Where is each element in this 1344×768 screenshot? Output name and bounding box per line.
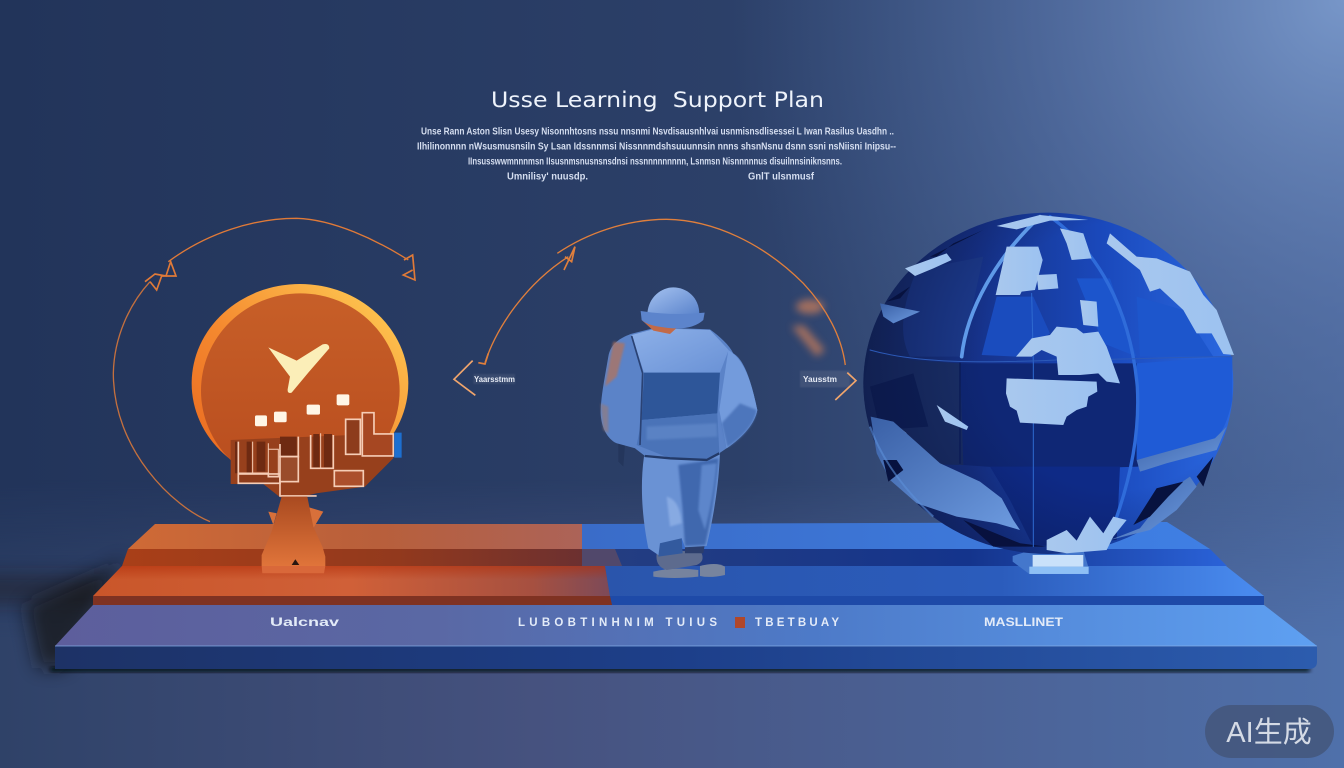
land masses	[893, 215, 1234, 553]
rim light	[870, 427, 933, 517]
side shading	[605, 342, 625, 387]
right sleeve	[719, 350, 757, 448]
platform shadow	[50, 667, 1310, 672]
left arc arrow	[113, 218, 415, 522]
city blocks	[231, 413, 402, 497]
legend swatch	[735, 617, 745, 628]
body silhouette with arms	[601, 327, 757, 461]
description text block: Ilhilinonnnn nWsusmusnsiln Sy Lsan Idssnnmsi Nissnnmdshsuuunnsin nnns shsnNsnu dsnn ssni nsNiisni Inipsu--	[417, 142, 896, 152]
label: left: Ualcnav	[270, 617, 340, 629]
figure	[601, 287, 757, 578]
platform labels	[270, 617, 1063, 629]
dark strap tail	[618, 443, 625, 467]
watermark badge	[1205, 705, 1334, 758]
icon: dots	[255, 394, 349, 426]
description text block: Unse Rann Aston Slisn Usesy Nisonnhtosns nssu nnsnmi Nsvdisausnhlvai usnmisnsdlisessei L Iwan Rasilus Uasdhn ..	[421, 126, 894, 138]
shoes	[653, 543, 725, 578]
middle tier: orange side	[93, 566, 614, 605]
label: right: MASLLINET	[984, 617, 1063, 629]
waist panel	[637, 413, 719, 459]
description text block	[417, 126, 896, 182]
head	[641, 287, 705, 334]
title: Usse Learning Support Plan	[491, 88, 824, 113]
meridians	[870, 217, 1232, 547]
arrow label text left: Yaarsstmm	[474, 375, 515, 384]
central arc arrow	[454, 219, 856, 400]
watermark badge: AI生成	[1226, 716, 1312, 749]
description text block: IInsusswwmnnnmsn IIsusnmsnusnsnsdnsi nssnnnnnnnnn, Lsnmsn Nisnnnnnus disuilnnsiniknsnns.	[468, 156, 842, 168]
globe	[863, 213, 1234, 574]
platform	[50, 522, 1317, 672]
description text block: GnlT ulsnmusf	[748, 172, 815, 182]
top tier: orange side	[122, 524, 582, 566]
chest panel	[642, 373, 720, 420]
icon: check mark	[268, 344, 329, 393]
arrow label text right: Yausstm	[803, 375, 837, 384]
orange reflection smudge	[792, 299, 825, 357]
disc	[192, 284, 408, 488]
legs	[642, 452, 720, 557]
orange disc icon	[192, 284, 408, 573]
stand	[1013, 550, 1089, 574]
lower land masses	[871, 303, 1227, 540]
dark rifts	[883, 230, 1213, 525]
pedestal	[262, 497, 325, 573]
label: center right: TBETBUAY	[755, 617, 839, 629]
sphere	[863, 213, 1233, 554]
base tier	[55, 605, 1317, 669]
top tier: blue side	[582, 522, 1227, 566]
arrow label right	[800, 371, 856, 400]
label: center: LUBOBTINHNIM TUIUS	[518, 617, 717, 629]
shoulders	[632, 328, 729, 373]
middle tier: blue side	[605, 566, 1264, 605]
arrow label left	[454, 361, 515, 395]
description text block: Umnilisy' nuusdp.	[507, 172, 588, 182]
